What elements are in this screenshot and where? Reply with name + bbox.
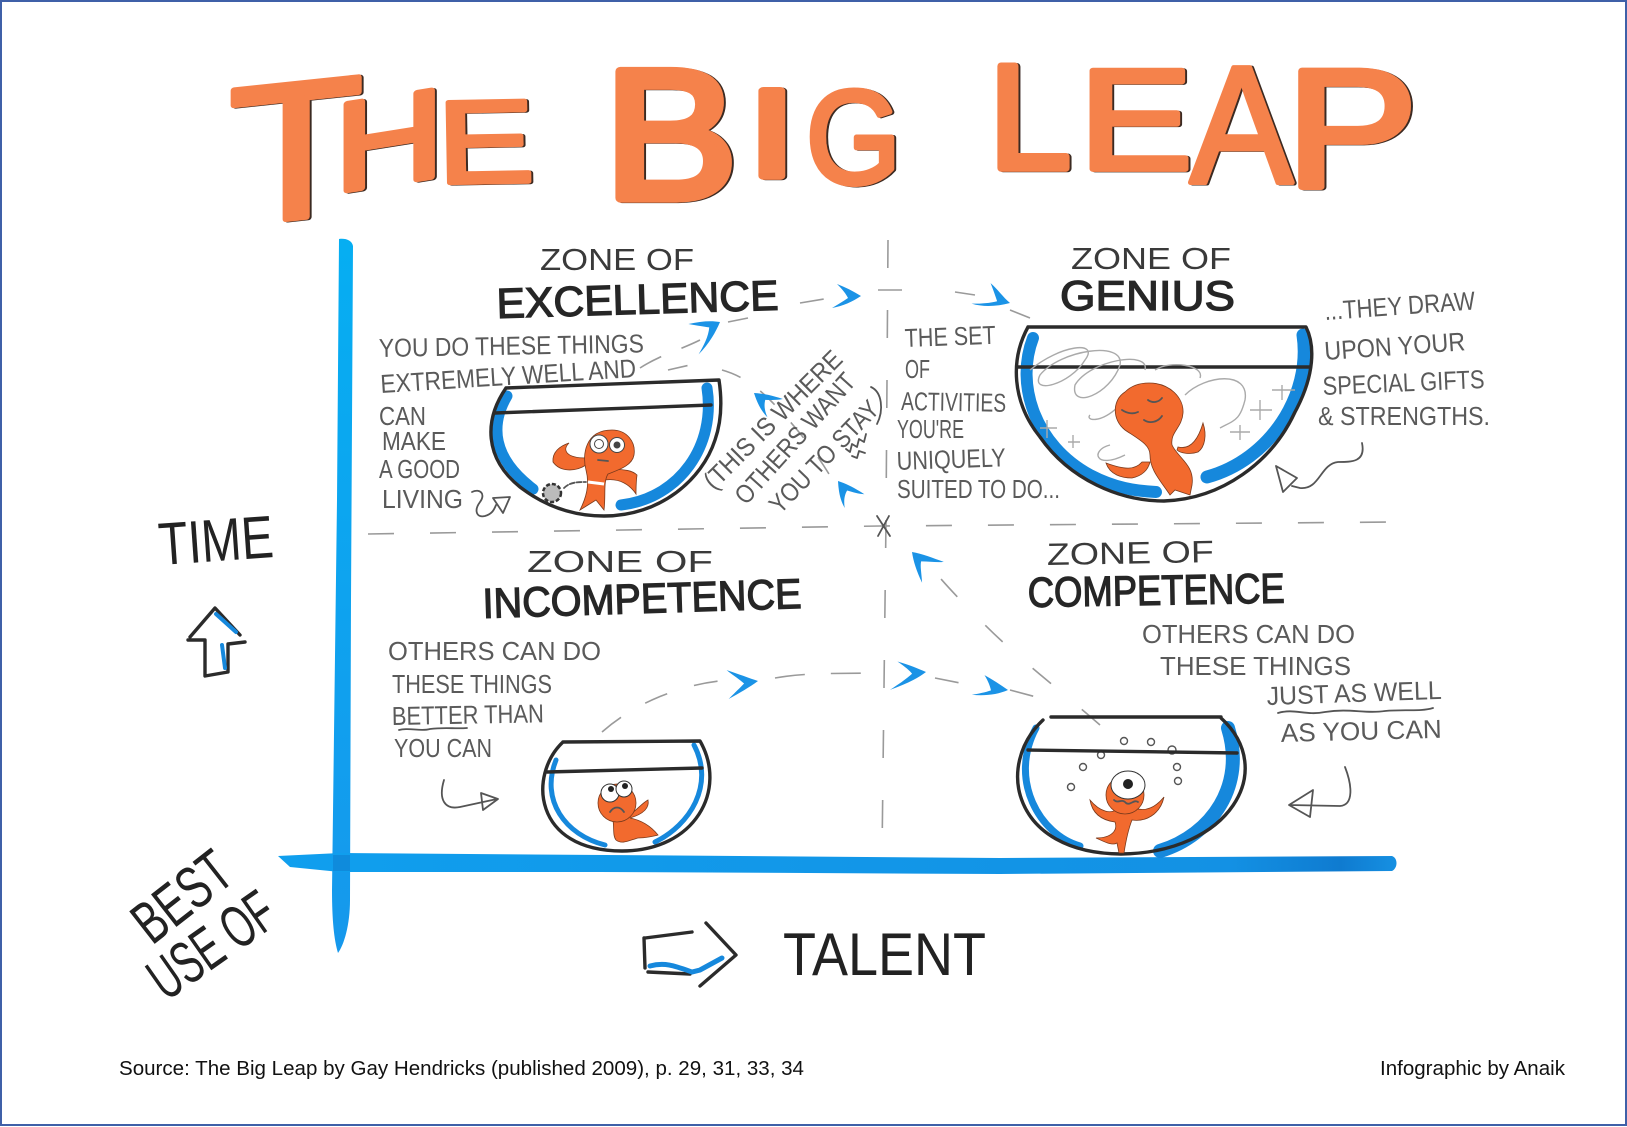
heading: zone of competence: ZONE OF [1047, 534, 1214, 572]
arrow: genius [971, 281, 1012, 310]
icon: up arrow [188, 608, 245, 676]
arrow: competence curved [1289, 767, 1350, 817]
fishbowl: competence [1018, 717, 1245, 854]
source credit: Source: The Big Leap by Gay Hendricks (published 2009), p. 29, 31, 33, 34 [119, 1057, 804, 1080]
heading: zone of excellence: ZONE OF [540, 242, 694, 277]
text: competence description: THESE THINGS [1160, 651, 1351, 681]
icon: right arrow [644, 923, 736, 986]
arrow: incompetence curved [442, 780, 498, 810]
fishbowl: incompetence [543, 741, 710, 851]
heading: zone of excellence [496, 242, 779, 327]
text: genius left description: SUITED TO DO... [897, 474, 1060, 504]
title: H [335, 63, 443, 219]
fishbowl: genius [1016, 327, 1312, 501]
axis label: best use of: USE OF [135, 877, 288, 1013]
panel: zone of genius [896, 241, 1490, 504]
text: genius left description: UNIQUELY [896, 442, 1006, 476]
panel: zone of incompetence [388, 544, 802, 851]
note: this is where others want you to stay: YOU TO STAY [763, 394, 885, 519]
vertical axis [332, 239, 353, 953]
text: genius left description: ACTIVITIES [901, 386, 1006, 418]
title: A [1190, 33, 1293, 219]
text: genius right description: UPON YOUR [1323, 326, 1466, 366]
text: competence description [1142, 619, 1442, 748]
text: genius right description: SPECIAL GIFTS [1322, 364, 1485, 401]
axis label: best use of: BEST [119, 837, 245, 956]
panel: zone of competence [888, 534, 1442, 854]
title: I [748, 65, 796, 203]
fish: incompetence [598, 781, 658, 842]
text: genius left description: YOU'RE [897, 414, 964, 444]
axis crossing [333, 855, 350, 871]
title: G [806, 63, 901, 212]
text: excellence description: A GOOD [379, 454, 460, 484]
infographic credit: Infographic by Anaik [1380, 1057, 1566, 1080]
note: this is where others want you to stay: OTHERS WANT [728, 367, 862, 510]
arrows: competence [888, 540, 1008, 696]
text: genius left description: THE SET [904, 320, 996, 353]
axis label: time: TIME [156, 503, 276, 578]
heading: zone of genius: GENIUS [1060, 272, 1235, 319]
title: T [229, 35, 363, 267]
text: excellence description: YOU DO THESE THINGS [379, 328, 644, 363]
text: incompetence description [388, 636, 601, 763]
title [229, 31, 1417, 267]
text: incompetence description: YOU CAN [394, 733, 492, 763]
title: P [1286, 34, 1417, 222]
heading: zone of excellence: EXCELLENCE [496, 272, 779, 327]
title: B [604, 31, 737, 237]
arrow: incompetence [727, 669, 759, 699]
text: incompetence description: THESE THINGS [392, 669, 552, 699]
text: excellence description: EXTREMELY WELL AND [379, 353, 637, 399]
axis label: best use of [119, 837, 288, 1013]
heading: zone of incompetence [482, 544, 802, 627]
text: excellence description: LIVING [382, 484, 463, 514]
swirl and sparkles [1030, 348, 1295, 460]
heading: zone of incompetence: ZONE OF [527, 544, 713, 579]
title: L [989, 35, 1071, 200]
text: genius left description [896, 320, 1060, 504]
text: excellence description: MAKE [382, 426, 446, 456]
arrow: genius squiggle [1276, 443, 1363, 492]
heading: zone of competence: COMPETENCE [1027, 565, 1285, 616]
text: genius right description [1318, 285, 1490, 431]
text: genius left description: OF [905, 354, 930, 384]
text: genius right description: & STRENGTHS. [1318, 401, 1490, 431]
heading: zone of genius [1060, 241, 1235, 319]
title: E [1079, 41, 1192, 200]
text: excellence description: CAN [379, 401, 426, 431]
text: excellence description [379, 328, 644, 514]
fish: excellence [543, 430, 637, 510]
axis label: talent: TALENT [783, 921, 986, 988]
text: incompetence description: BETTER THAN [392, 698, 544, 731]
text: competence description: AS YOU CAN [1280, 714, 1442, 748]
text: genius right description: ...THEY DRAW [1323, 285, 1476, 326]
note: this is where others want you to stay: (THIS IS WHERE [697, 344, 848, 495]
arrow: excellence squiggle [472, 491, 510, 516]
fish: competence [1090, 771, 1164, 853]
text: incompetence description: OTHERS CAN DO [388, 636, 601, 666]
heading: zone of competence [1027, 534, 1285, 616]
dashed quadrant dividers [368, 240, 1400, 855]
panel: zone of excellence [379, 242, 885, 519]
fish: genius [1106, 383, 1205, 495]
heading: zone of genius: ZONE OF [1071, 241, 1231, 276]
bubbles [1068, 738, 1182, 790]
title: E [436, 76, 535, 208]
arrows: excellence [687, 284, 864, 508]
text: competence description: OTHERS CAN DO [1142, 619, 1355, 649]
text: competence description: JUST AS WELL [1266, 675, 1442, 711]
flight path dashes [602, 290, 1100, 732]
horizontal axis [278, 853, 1396, 874]
heading: zone of incompetence: INCOMPETENCE [482, 570, 802, 627]
fishbowl: excellence [491, 380, 721, 516]
